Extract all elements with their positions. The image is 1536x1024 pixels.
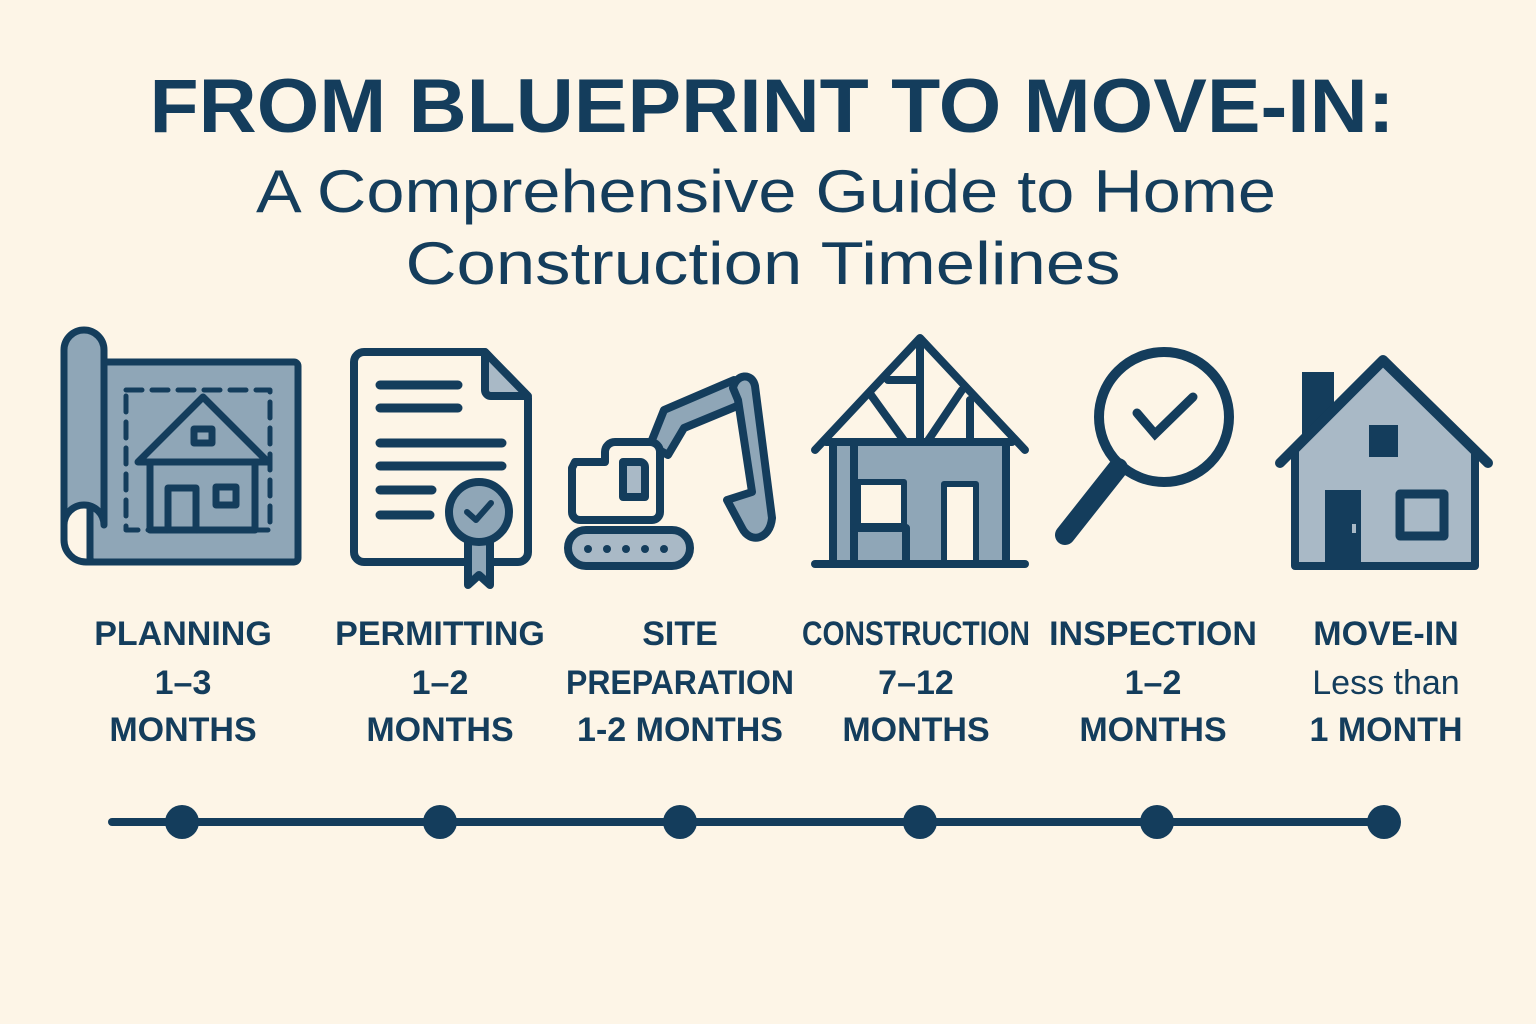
label: permitting: PERMITTING [335,615,545,653]
label: inspection: MONTHS [1079,711,1227,749]
label: planning: PLANNING [94,615,272,653]
label: inspection: 1–2 [1125,664,1181,702]
icon: magnifier check [1065,352,1229,535]
label: inspection: INSPECTION [1049,615,1257,653]
label: permitting [335,615,545,749]
icon: house framing [815,338,1025,564]
label: planning: MONTHS [109,711,257,749]
label: site preparation: PREPARATION [566,664,794,702]
icon: permit document [354,352,528,585]
timeline [108,805,1401,839]
label: site preparation: 1-2 MONTHS [577,711,783,749]
label: inspection [1049,615,1257,749]
label: permitting: 1–2 [412,664,468,702]
labels [94,615,1462,749]
label: construction: 7–12 [878,664,954,702]
label: permitting: MONTHS [366,711,514,749]
label: construction: CONSTRUCTION [802,615,1030,653]
label: planning [94,615,272,749]
label: move-in: 1 MONTH [1310,711,1462,749]
label: move-in [1310,615,1462,749]
title: Construction Timelines [406,230,1120,297]
label: planning: 1–3 [155,664,211,702]
label: construction [802,615,1030,749]
label: move-in: Less than [1312,664,1460,702]
title: FROM BLUEPRINT TO MOVE-IN: [150,64,1394,149]
label: site preparation: SITE [642,615,718,653]
label: move-in: MOVE-IN [1313,615,1459,653]
label: site preparation [566,615,794,749]
label: construction: MONTHS [842,711,990,749]
title [150,64,1394,297]
title: A Comprehensive Guide to Home [256,158,1276,225]
icon: finished house [1280,360,1488,566]
icon: excavator [568,376,772,566]
icon: blueprint [64,330,298,562]
